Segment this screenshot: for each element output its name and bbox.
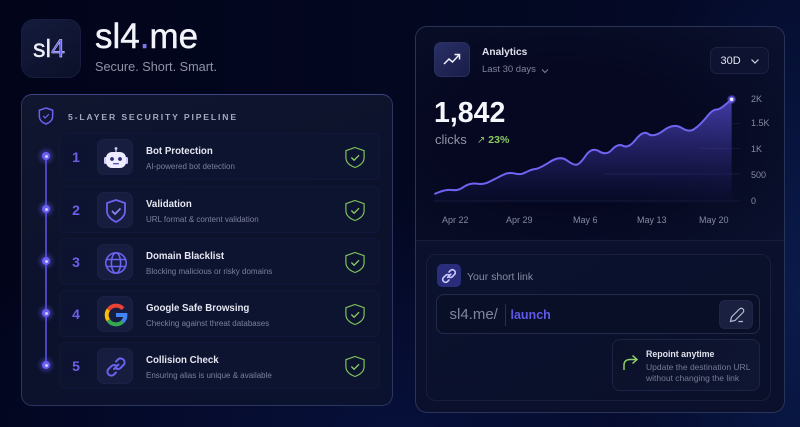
y label 1.5K: 1.5K	[751, 118, 770, 128]
x label Apr 29: Apr 29	[506, 215, 533, 225]
icon: green check shield	[345, 304, 365, 326]
row 1: bot protection	[59, 133, 380, 180]
icon: validation shield	[97, 192, 133, 228]
row title: Bot Protection	[146, 146, 213, 157]
row title: Domain Blacklist	[146, 251, 224, 262]
analytics section background	[416, 27, 784, 241]
date range label: Last 30 days	[482, 64, 536, 75]
timeline dot 5	[42, 361, 50, 369]
input divider	[505, 304, 506, 326]
icon: chevron	[751, 59, 759, 64]
row description: AI-powered bot detection	[146, 162, 235, 170]
icon: trend tile	[434, 42, 470, 77]
panel: security pipeline	[21, 94, 393, 406]
timeline dot 2	[42, 205, 50, 213]
chart x axis labels	[442, 215, 729, 225]
x label May 13: May 13	[637, 215, 667, 225]
y label 2K: 2K	[751, 94, 762, 104]
chart: clicks over time	[434, 95, 740, 202]
short link label: Your short link	[467, 271, 533, 283]
y label 0: 0	[751, 196, 756, 206]
icon: green check shield	[345, 146, 365, 168]
step number 4	[64, 302, 88, 326]
icon: green check shield	[345, 356, 365, 378]
row title: Collision Check	[146, 355, 219, 366]
panel: analytics and short link	[415, 26, 785, 413]
icon: link tile	[437, 264, 461, 287]
icon: google logo	[97, 296, 133, 332]
url prefix: sl4.me/	[450, 306, 498, 323]
row description: URL format & content validation	[146, 214, 259, 224]
icon: green check shield	[345, 200, 365, 222]
edit button	[719, 300, 753, 329]
row title: Validation	[146, 199, 192, 210]
x label Apr 22: Apr 22	[442, 215, 469, 225]
row 4: google safe browsing	[59, 290, 380, 337]
step number 4: 4	[72, 306, 80, 322]
step number 3	[64, 250, 88, 274]
timeline dot 3	[42, 257, 50, 265]
timeline dot 4	[42, 309, 50, 317]
row title: Google Safe Browsing	[146, 303, 249, 314]
row description: Blocking malicious or risky domains	[146, 266, 272, 276]
step number 5	[64, 354, 88, 378]
pipeline heading: 5-LAYER SECURITY PIPELINE	[68, 112, 238, 122]
row description: Checking against threat databases	[146, 318, 269, 328]
callout description	[646, 362, 750, 382]
row 3: domain blacklist	[59, 238, 380, 285]
logo tile	[21, 19, 81, 78]
brand title: sl4.me	[95, 17, 198, 56]
icon: chain link	[97, 348, 133, 384]
icon: pipeline shield	[38, 107, 54, 125]
icon: pencil	[730, 308, 744, 322]
y label 1K: 1K	[751, 144, 762, 154]
step number 2: 2	[72, 202, 80, 218]
growth badge: ↗ 23%	[477, 134, 509, 146]
analytics heading: Analytics	[482, 47, 527, 58]
timeline dot 1	[42, 152, 50, 160]
icon: green check shield	[345, 252, 365, 274]
row 5: collision check	[59, 342, 380, 389]
x label May 20: May 20	[699, 215, 729, 225]
logo text: sl4	[33, 35, 65, 63]
step number 2	[64, 198, 88, 222]
step number 1: 1	[72, 149, 80, 165]
range selector	[710, 47, 769, 74]
clicks label: clicks	[435, 132, 467, 147]
click count: 1,842	[434, 97, 505, 129]
tagline: Secure. Short. Smart.	[95, 60, 217, 74]
alias: launch	[510, 308, 551, 322]
row description: Ensuring alias is unique & available	[146, 370, 272, 380]
y label 500: 500	[751, 170, 766, 180]
icon: date chevron	[542, 69, 548, 74]
chart y axis labels	[751, 94, 770, 206]
x label May 6: May 6	[573, 215, 598, 225]
icon: globe	[97, 244, 133, 280]
callout title: Repoint anytime	[646, 348, 714, 358]
icon: curved arrow	[623, 355, 638, 370]
step number 3: 3	[72, 254, 80, 270]
callout: repoint anytime	[612, 339, 760, 391]
callout description: Update the destination URL	[646, 362, 750, 372]
link input field	[436, 294, 760, 334]
row 2: validation	[59, 186, 380, 233]
icon: robot	[97, 139, 133, 175]
card: short link	[426, 254, 771, 401]
step number 5: 5	[72, 358, 80, 374]
selector value: 30D	[720, 55, 741, 67]
callout description: without changing the link	[646, 372, 739, 382]
timeline connector	[45, 156, 47, 365]
step number 1	[64, 145, 88, 169]
